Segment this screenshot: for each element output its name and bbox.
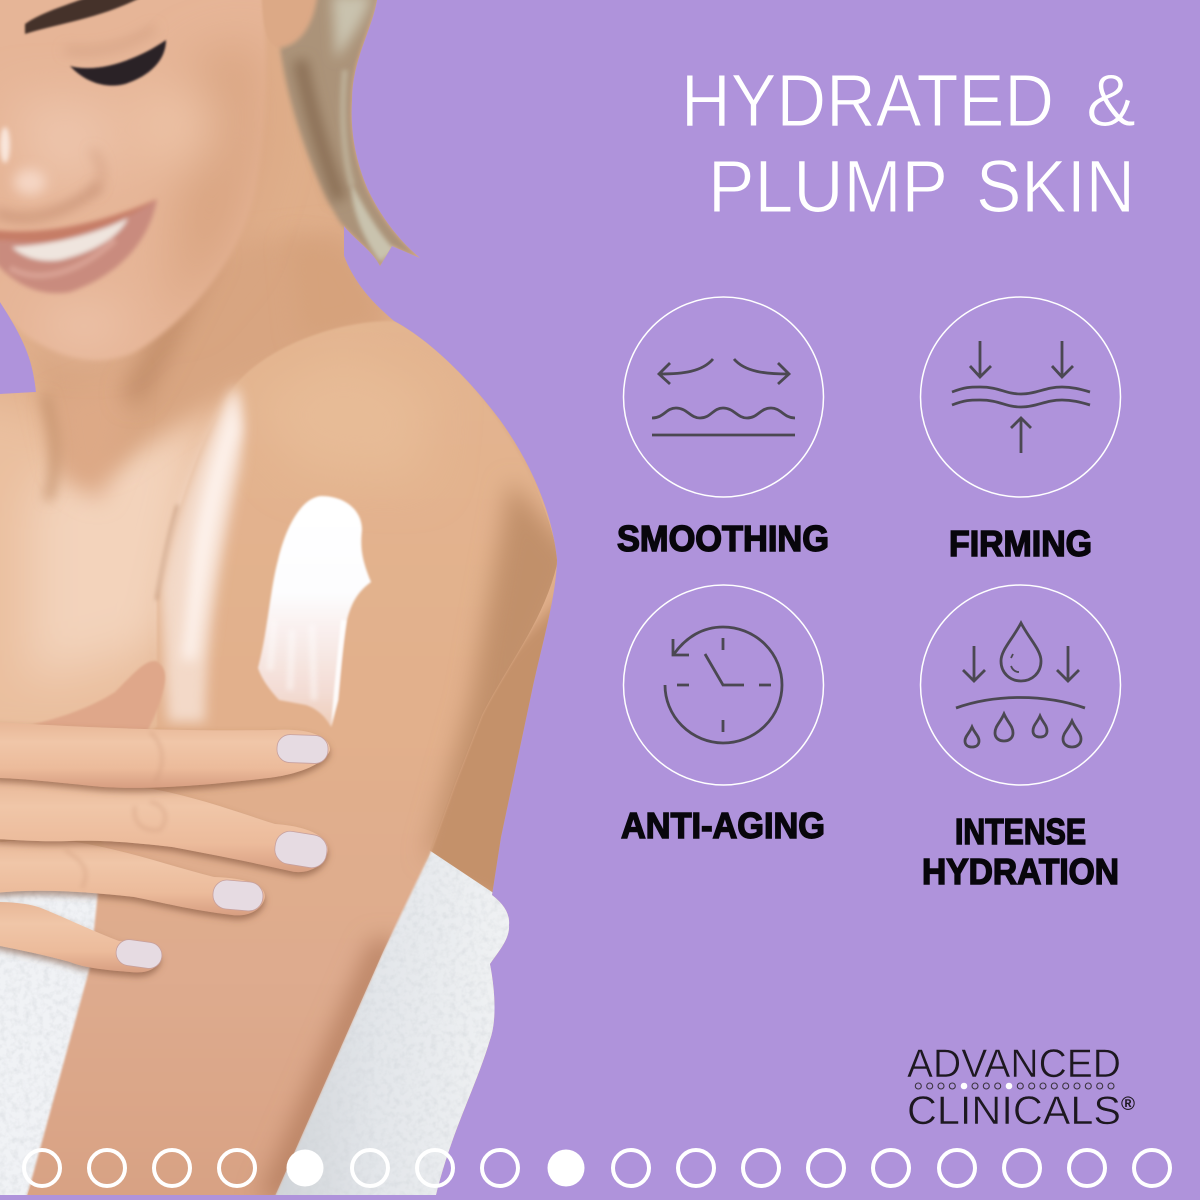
- photo: woman applying cream to her arm: [0, 0, 600, 1200]
- thumb: [30, 661, 165, 732]
- eye and eyebrow: [25, 0, 166, 86]
- title: [681, 59, 1136, 228]
- bottom strip: [0, 1195, 1200, 1200]
- nose: [0, 127, 102, 218]
- finger 2: [0, 778, 328, 872]
- carousel dots: [24, 1150, 1170, 1186]
- label: intense hydration: HYDRATION: [922, 851, 1119, 892]
- label: smoothing: SMOOTHING: [617, 518, 829, 559]
- icon: smoothing: [624, 297, 824, 497]
- benefit: firming: [920, 297, 1120, 564]
- label: intense hydration: INTENSE: [955, 811, 1086, 852]
- label: intense hydration: [922, 811, 1119, 892]
- arm shading: [250, 350, 580, 1200]
- back behind the arm: [430, 602, 552, 897]
- neck: [30, 230, 394, 500]
- title: &: [1086, 59, 1136, 142]
- title: SKIN: [976, 145, 1135, 228]
- title: HYDRATED: [681, 59, 1054, 142]
- crease between chest and arm: [157, 505, 178, 600]
- ear: [262, 0, 266, 16]
- logo dots: [915, 1083, 1114, 1089]
- finger 3: [0, 840, 265, 915]
- finger 1: [0, 722, 330, 788]
- shoulder skin sheen: [160, 385, 243, 722]
- registered mark: ®: [1121, 1094, 1135, 1115]
- mouth: [0, 199, 157, 293]
- benefit: intense hydration: [920, 585, 1120, 892]
- chest: [0, 393, 217, 729]
- icon: anti-aging clock: [624, 585, 824, 785]
- towel: left: [0, 890, 99, 1195]
- arm and shoulder: [27, 321, 558, 1196]
- label: anti-aging: ANTI-AGING: [621, 805, 825, 846]
- benefit: smoothing: [617, 297, 829, 559]
- nails: [114, 734, 329, 970]
- finger 4: [0, 902, 161, 972]
- face: [0, 0, 266, 360]
- hair: [280, 0, 422, 268]
- logo wordmark: advanced: ADVANCED: [907, 1042, 1121, 1086]
- skin base: [0, 0, 570, 1195]
- finger knuckles: [65, 732, 165, 888]
- cream swipe: [258, 496, 371, 727]
- icon: hydration drops: [920, 585, 1120, 785]
- label: firming: FIRMING: [949, 523, 1092, 564]
- towel: right: [270, 850, 510, 1196]
- title: PLUMP: [708, 145, 948, 228]
- benefit: anti-aging: [621, 585, 825, 846]
- face shading and highlights: [10, 40, 262, 345]
- logo wordmark: clinicals: CLINICALS: [907, 1089, 1121, 1133]
- brand logo: [907, 1042, 1135, 1133]
- icon: firming: [920, 297, 1120, 497]
